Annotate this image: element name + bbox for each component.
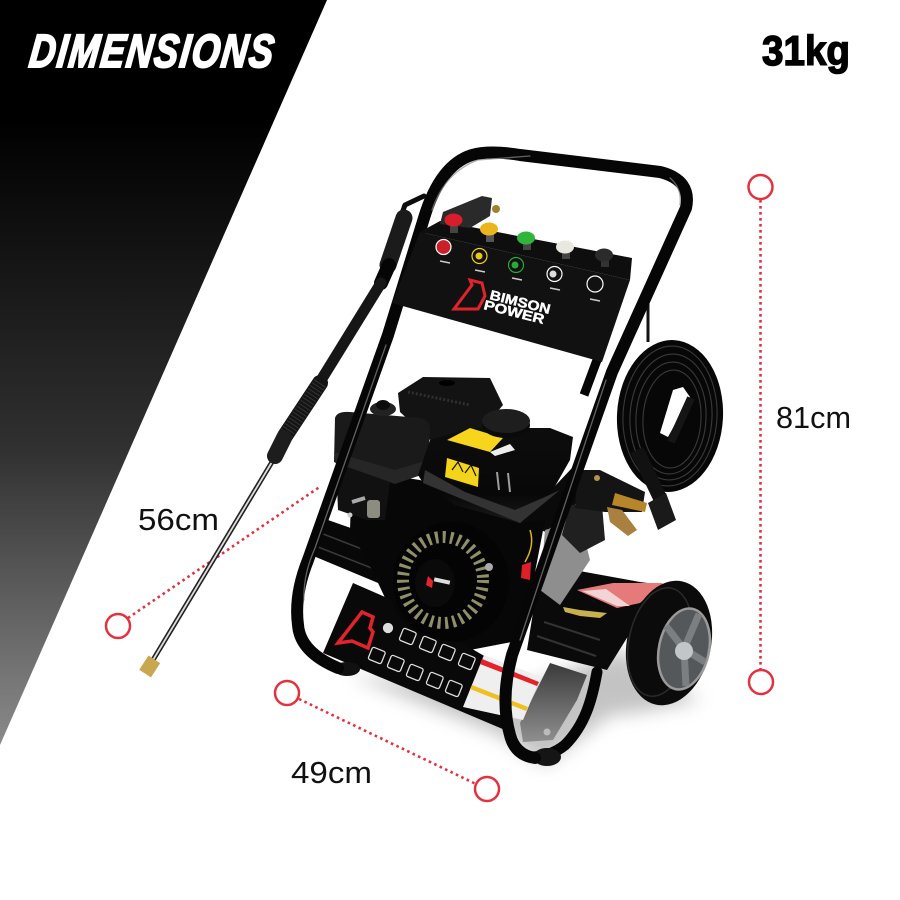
front control plate — [323, 583, 541, 730]
lower cross bars — [311, 520, 395, 590]
red switch and yellow wire — [521, 530, 532, 580]
dimension: height 81cm: 81cm — [776, 400, 851, 435]
nozzle: yellow — [480, 222, 498, 242]
nozzle: white — [556, 240, 574, 259]
control icons — [368, 624, 476, 697]
recoil starter — [393, 522, 509, 642]
nozzle guide icons — [436, 240, 603, 301]
dimension: depth 56cm: 56cm — [138, 502, 219, 537]
rear tube of frame behind panel — [584, 360, 597, 395]
warning label — [463, 655, 541, 720]
dimension: height 81cm — [748, 175, 851, 694]
air box rear — [398, 377, 503, 440]
air filter box — [334, 400, 430, 520]
top panel — [392, 196, 632, 362]
nozzle: green — [517, 232, 535, 250]
nozzle: red — [444, 214, 462, 233]
dimension: depth 56cm — [106, 486, 321, 638]
dimension: width 49cm: 49cm — [291, 755, 372, 790]
dimension: width 49cm — [275, 681, 499, 801]
bottom feet — [334, 662, 360, 676]
fuel tank — [418, 409, 573, 523]
weight label: 31kg — [762, 27, 850, 74]
brand logo — [454, 280, 552, 327]
nozzle: black — [595, 248, 613, 267]
hose coil — [613, 300, 727, 530]
lance holder — [440, 196, 492, 228]
brand logo: POWER — [482, 297, 546, 327]
brand logo: BIMSON — [488, 287, 552, 317]
engine body — [350, 470, 545, 650]
rear deck with pink label — [527, 566, 663, 670]
pump — [520, 468, 647, 605]
right base runner — [520, 663, 597, 766]
main frame tube — [297, 152, 687, 758]
background wedge — [0, 0, 327, 745]
spray gun and lance — [139, 196, 424, 677]
wheel — [615, 573, 723, 713]
ground shadow — [350, 650, 700, 765]
pressure washer product — [139, 152, 727, 766]
title: DIMENSIONS — [27, 25, 279, 77]
